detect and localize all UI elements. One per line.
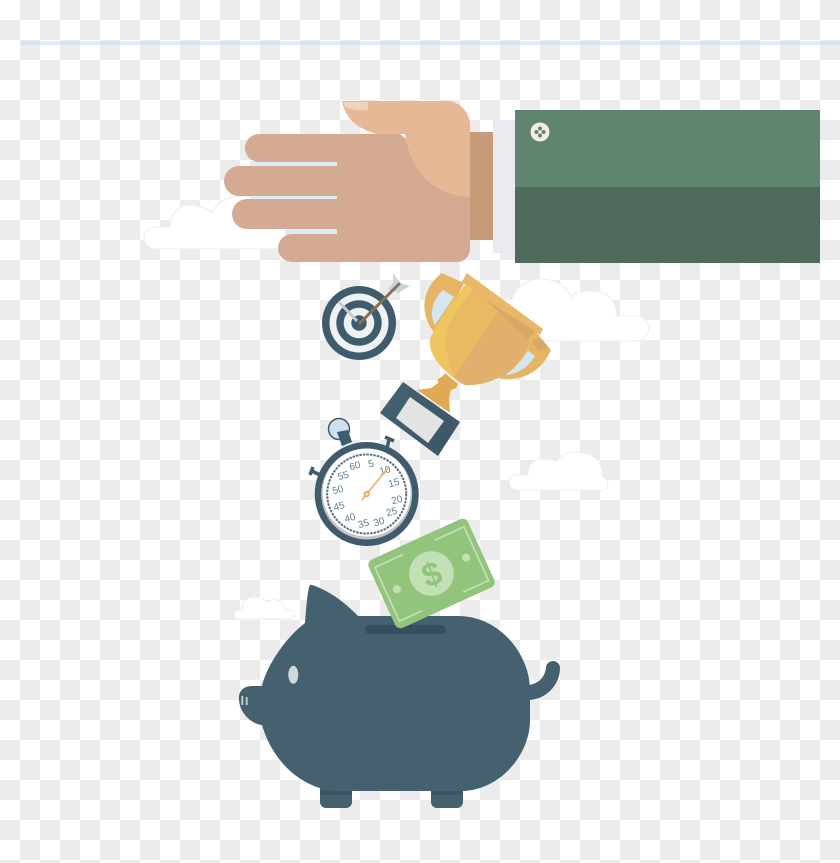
sleeve: lower dark band	[515, 187, 820, 263]
cloud: left behind hand	[144, 196, 300, 249]
stopwatch: left button	[310, 467, 322, 476]
stopwatch: numerals: 35	[357, 518, 371, 531]
stopwatch: needle	[362, 468, 388, 500]
cloud: small near pig	[234, 597, 294, 619]
pig: feet	[320, 785, 463, 808]
trophy: base	[380, 382, 460, 456]
cloud: right of trophy	[508, 279, 648, 341]
hand: thumb	[342, 101, 470, 197]
stopwatch: numerals: 45	[332, 500, 346, 514]
stopwatch: crown	[337, 430, 352, 446]
stopwatch: numerals: 20	[390, 494, 404, 507]
stopwatch: numerals: 55	[337, 470, 351, 483]
trophy: stem and foot	[417, 373, 458, 413]
stopwatch: numerals: 40	[343, 512, 357, 525]
hand: shirt cuff	[493, 120, 516, 253]
stopwatch: right button	[385, 437, 394, 449]
icon: target with arrow	[322, 273, 410, 360]
trophy: rim fold shadow	[485, 299, 535, 340]
trophy: left handle	[424, 273, 464, 332]
stopwatch: numerals: 50	[331, 484, 345, 497]
hand: palm and fingers	[224, 134, 470, 262]
hand: thumbnail	[343, 102, 368, 110]
pig: snout marks	[242, 696, 247, 705]
pig: eye	[288, 666, 298, 684]
pig: tail	[529, 661, 560, 700]
stopwatch: numerals: 5	[367, 458, 376, 471]
icon: dollar bill: $	[417, 553, 447, 595]
trophy: plate	[396, 397, 444, 443]
stopwatch: numerals	[331, 458, 404, 531]
top horizontal line	[21, 41, 840, 45]
icon: dollar bill	[366, 517, 497, 630]
hand: wrist	[469, 132, 494, 240]
hand	[224, 101, 516, 262]
trophy: cup highlight strip	[430, 279, 478, 378]
trophy: cup	[430, 279, 538, 385]
stopwatch: knob	[328, 418, 350, 440]
trophy: rim	[462, 273, 543, 335]
hand: finger gaps	[250, 161, 338, 235]
stopwatch: numerals: 60	[348, 460, 362, 473]
icon: stopwatch	[310, 418, 419, 546]
stopwatch: numerals: 15	[387, 477, 401, 490]
pig: body	[239, 585, 530, 791]
stopwatch: numerals: 25	[385, 506, 399, 519]
sleeve: upper light band	[515, 110, 820, 187]
icon: trophy	[380, 273, 551, 456]
stopwatch: numerals: 10	[378, 464, 392, 478]
trophy: right handle	[497, 332, 551, 379]
cloud: middle right	[509, 452, 608, 490]
stopwatch: case	[315, 442, 419, 546]
trophy: cup shaded half	[455, 311, 530, 385]
piggy bank	[239, 585, 560, 808]
pig: coin slot	[365, 625, 446, 634]
suit sleeve	[515, 110, 820, 263]
sleeve: button	[530, 122, 550, 142]
stopwatch: numerals: 30	[372, 516, 386, 529]
